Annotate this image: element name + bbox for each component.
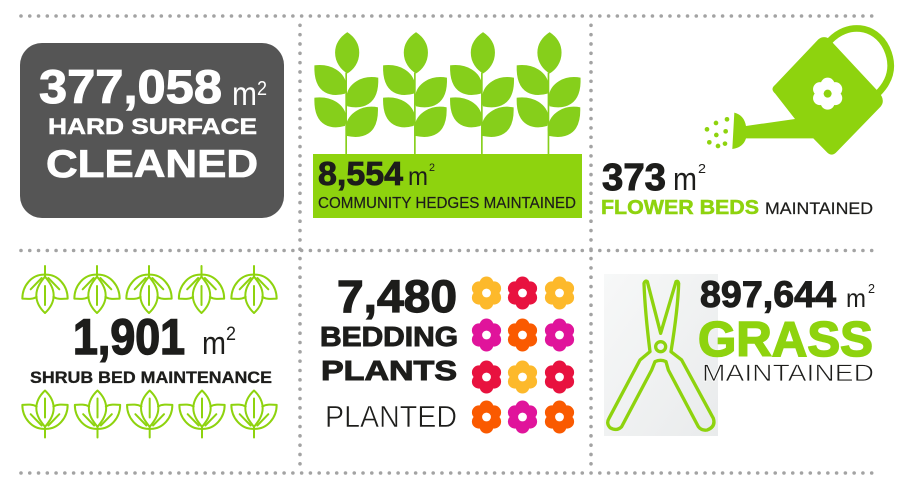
grass figure: 897,644: [700, 274, 836, 315]
grey rounded card: [20, 43, 284, 218]
icon: grid of coloured flowers: [472, 276, 574, 434]
hard surface label: HARD SURFACE: [48, 114, 257, 139]
bedding plants figure: 7,480: [337, 271, 457, 322]
shrub bed label: SHRUB BED MAINTENANCE: [30, 369, 272, 387]
bedding label: BEDDING: [320, 321, 458, 352]
shrub bed figure: 1,901: [73, 309, 185, 365]
grass label: GRASS: [698, 313, 873, 367]
hedges unit: m: [408, 161, 428, 191]
flower beds figure: 373: [602, 157, 666, 199]
shrub bed unit: m: [202, 325, 226, 361]
flower beds label: FLOWER BEDS: [601, 197, 759, 219]
panel: flower beds: [601, 28, 891, 219]
shrub bed unit exponent: 2: [226, 324, 236, 345]
hedges figure: 8,554: [318, 155, 404, 192]
hard surface unit: m: [232, 75, 257, 112]
panel: hard surface cleaned: [20, 43, 284, 218]
icon: garden shears: [608, 281, 714, 430]
plants label: PLANTS: [321, 355, 457, 386]
grass unit exponent: 2: [868, 281, 875, 296]
panel: shrub bed maintenance: [22, 266, 277, 438]
flower beds unit: m: [673, 161, 697, 197]
hedges unit exponent: 2: [429, 162, 435, 174]
icon: top row of outlined leaves: [22, 266, 277, 313]
hard surface figure: 377,058: [39, 60, 222, 113]
panel: bedding plants: [320, 271, 574, 434]
icon: bottom row of outlined leaves: [22, 391, 277, 438]
cleaned label: CLEANED: [46, 143, 258, 186]
panel: community hedges: [313, 32, 582, 218]
hard surface unit exponent: 2: [257, 78, 267, 100]
panel: grass maintained: [604, 274, 875, 436]
planted label: PLANTED: [325, 399, 457, 434]
icon: watering can: [705, 28, 891, 155]
grass unit: m: [846, 283, 866, 313]
maintained label: MAINTAINED: [765, 200, 873, 218]
flower beds unit exponent: 2: [698, 161, 706, 176]
icon background square: [604, 274, 718, 436]
maintained label: MAINTAINED: [702, 360, 874, 387]
green base bar: [313, 154, 582, 218]
hedges label: COMMUNITY HEDGES MAINTAINED: [318, 195, 576, 212]
icon: row of hedge plants: [314, 32, 581, 154]
